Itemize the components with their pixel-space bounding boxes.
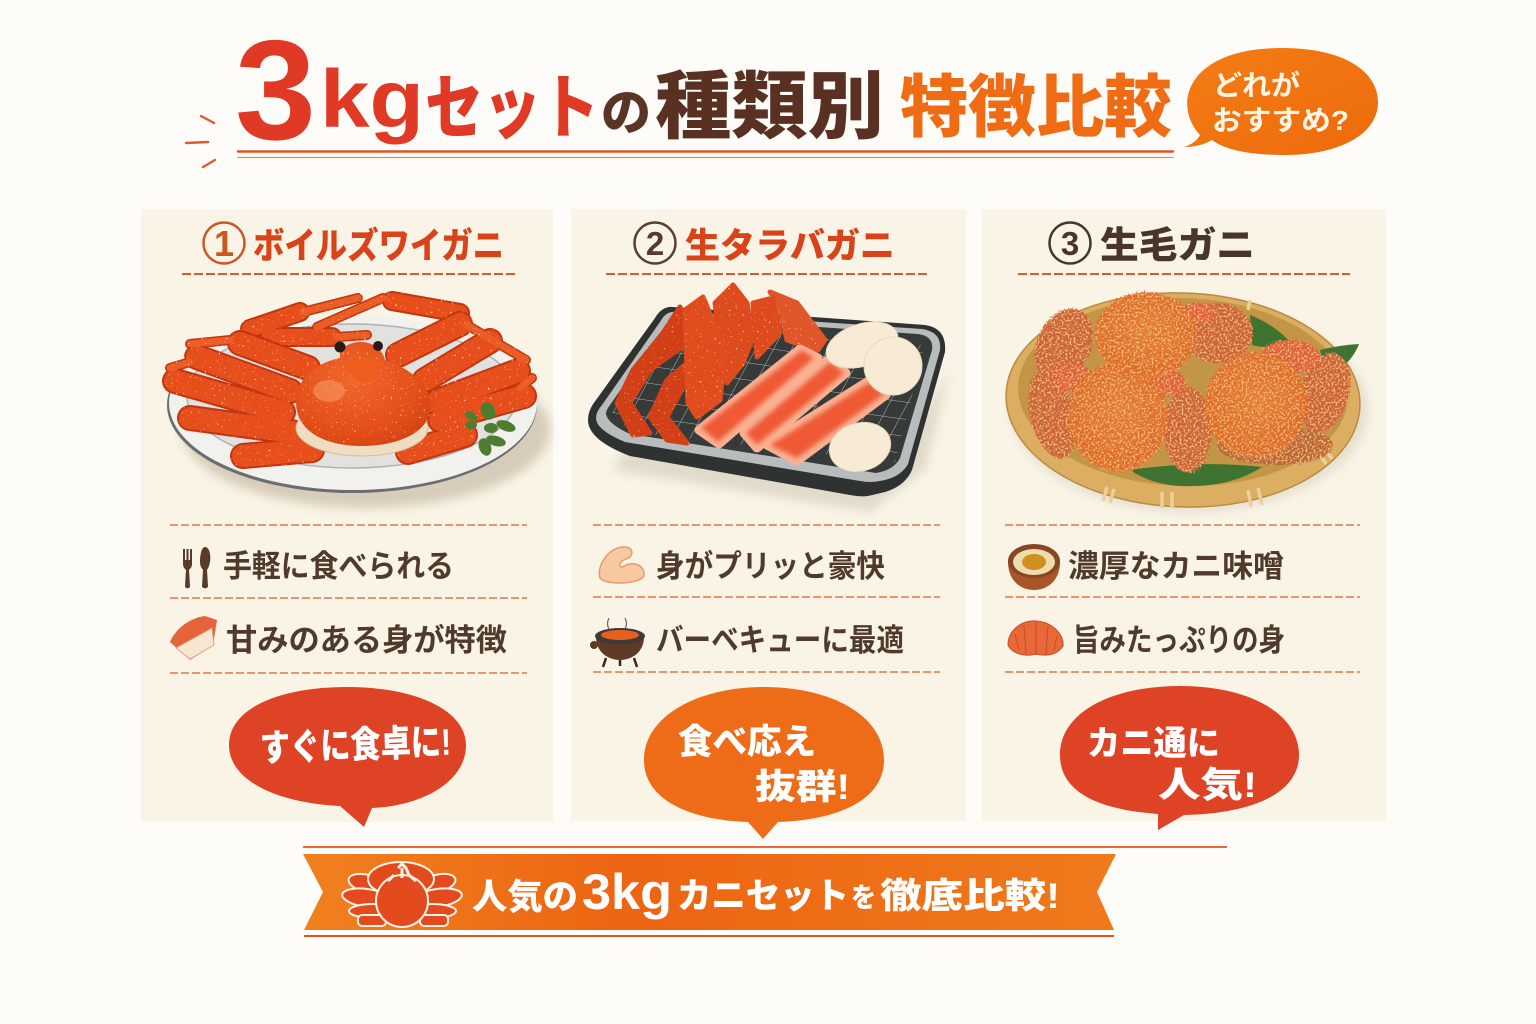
row text: 旨みたっぷりの身 [1073,623,1285,658]
bamboo basket [1002,287,1368,513]
title sparks [186,116,215,167]
row text: 手軽に食べられる [223,549,454,584]
panel heading: ボイルズワイガニ [253,225,504,266]
title underline [238,152,1173,158]
leaves [1130,315,1359,486]
panel background [982,209,1386,821]
plate [167,316,550,508]
herb garnish [463,400,517,458]
panel: raw king crab [571,209,966,839]
feature row: umami meat [1008,621,1285,658]
number badge 1: 1 [214,223,234,264]
feature row: easy to eat [183,547,454,588]
banner text: ninki no: 人気の [472,878,578,917]
number badge 1 [204,222,244,264]
number badge 3: 3 [1061,225,1079,262]
title [186,11,1173,170]
feature row: sweet meat [170,616,507,660]
crab shells [1068,292,1307,472]
panel background [571,209,966,821]
crab legs [617,285,825,443]
icon: miso bowl [1008,544,1060,590]
panel heading: 生タラバガニ [685,227,895,266]
callout text line 1: カニ通に [1087,725,1220,763]
title text: set: セット [425,69,599,147]
title text: kg: kg [320,54,424,145]
row text: 身がプリッと豪快 [656,549,885,584]
callout text line 1: 食べ応え [678,723,816,762]
crab body [296,341,430,456]
banner text: crab set: カニセット [677,877,849,916]
icon: flexed arm [599,547,644,583]
callout text line 2: 抜群! [755,768,850,807]
number badge 3 [1050,222,1090,264]
banner crab icon [341,862,463,927]
banner text: wo: を [851,883,876,913]
icon: crab meat [170,616,217,660]
callout: satisfying volume [644,687,884,839]
panel: raw hairy crab [982,209,1386,830]
callout: popular with crab lovers [1060,686,1299,830]
icon: shell meat [1008,621,1063,655]
crab meat pieces [699,349,886,461]
title text: no: の [601,85,651,141]
bubble line 2: おすすめ? [1212,105,1349,136]
panel: boiled snow crab [141,209,553,827]
banner text: tettei hikaku: 徹底比較! [880,877,1060,916]
icon: barbecue pot [590,618,645,667]
panel background [141,209,553,822]
icon: fork and spoon [183,547,210,588]
row text: 濃厚なカニ味噌 [1068,549,1284,584]
row text: バーベキューに最適 [656,623,904,658]
feature row: plump [599,547,885,584]
illustration: king crab tray [588,285,950,512]
title text: tokucho hikaku: 特徴比較 [900,70,1172,146]
bottom banner [303,847,1227,936]
title text: shuruibetsu: 種類別 [655,65,884,148]
callout text: すぐに食卓に! [259,721,452,769]
row text: 甘みのある身が特徴 [226,623,507,658]
number badge 2 [634,222,676,264]
feature row: barbecue [590,618,904,667]
illustration: hairy crabs in basket [1002,287,1368,513]
feature row: rich tomalley [1008,544,1284,590]
crab legs [1019,299,1359,473]
panel heading: 生毛ガニ [1100,225,1255,266]
speech bubble: which is recommended [1184,48,1378,155]
number badge 2: 2 [646,225,664,262]
illustration: snow crab on plate [167,298,550,508]
title text: 3: 3 [235,11,316,170]
white crab meat [820,314,922,478]
banner text: 3kg: 3kg [582,864,672,920]
bubble line 1: どれが [1213,69,1300,101]
callout: straight to the table [229,687,466,827]
crab legs [170,298,532,456]
tray [588,307,950,512]
callout text line 2: 人気! [1158,766,1257,805]
